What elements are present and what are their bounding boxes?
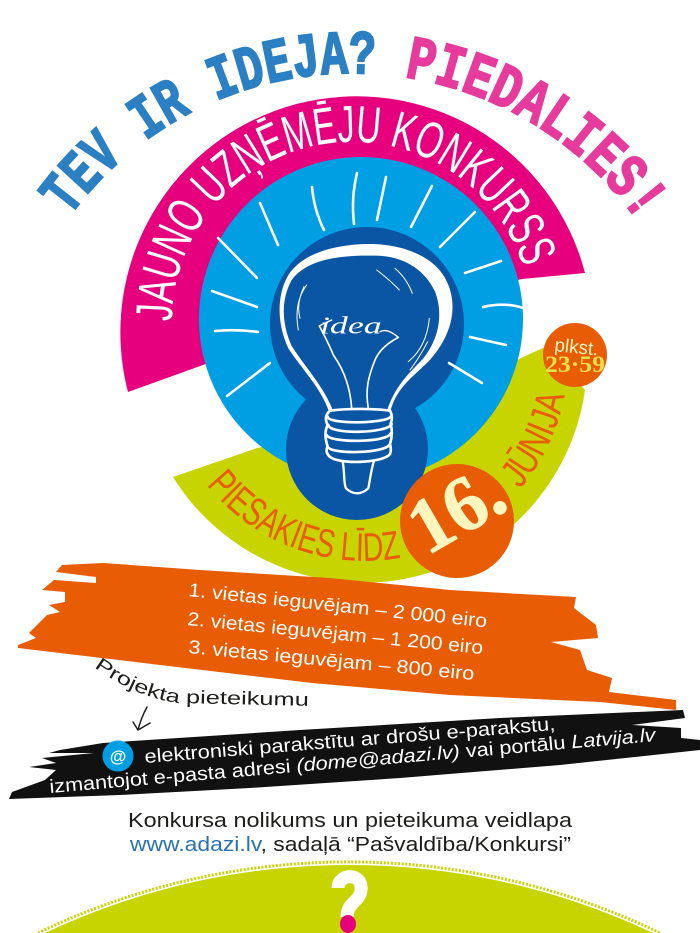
text: competition rules: www.adazi.lv , sadaļā “Pašvaldība/Konkursi” bbox=[129, 834, 571, 856]
badge: plkst. 23:59 bbox=[543, 323, 607, 387]
filament bbox=[319, 326, 352, 408]
panel: green crescent bbox=[173, 348, 585, 583]
badge: plkst. 23:59: plkst. bbox=[553, 335, 599, 361]
text: competition rules bbox=[128, 810, 573, 856]
icon: at sign bbox=[102, 740, 134, 772]
heading: JAUNO UZŅĒMĒJU KONKURSS: JAUNO UZŅĒMĒJU KONKURSS bbox=[136, 100, 555, 320]
panel: prizes brush stroke bbox=[18, 563, 676, 710]
light blue circle bbox=[199, 157, 523, 481]
prize lines: 2. vietas ieguvējam – 1 200 eiro bbox=[187, 609, 484, 659]
title: TEV IR IDEJA?: TEV IR IDEJA? bbox=[36, 30, 374, 210]
title: PIEDALIES!: PIEDALIES! bbox=[406, 36, 666, 214]
text: PIESAKIES LĪDZ: PIESAKIES LĪDZ bbox=[208, 468, 400, 561]
dark blue bulb backdrop bbox=[270, 227, 464, 520]
text: JŪNIJA: JŪNIJA bbox=[502, 395, 565, 486]
text: competition rules: Konkursa nolikums un pieteikuma veidlapa bbox=[128, 810, 573, 832]
prize lines: 3. vietas ieguvējam – 800 eiro bbox=[188, 637, 475, 685]
screw base bbox=[325, 409, 392, 462]
icon: light bulb bbox=[280, 244, 453, 493]
panel: submission brush stroke bbox=[9, 710, 700, 799]
icon: light rays bbox=[212, 173, 523, 396]
badge: plkst. 23:59: 23·59 bbox=[545, 352, 605, 377]
icon: at sign: @ bbox=[110, 747, 126, 766]
prize lines bbox=[187, 580, 488, 685]
idea handwriting: idea bbox=[320, 312, 382, 339]
badge: 16.: 16. bbox=[392, 447, 520, 571]
panel: pink arc bbox=[120, 96, 585, 392]
icon: arrow bbox=[133, 707, 150, 730]
text: Projekta pieteikumu: Projekta pieteikumu bbox=[96, 658, 308, 707]
panel: green dome bbox=[38, 862, 660, 933]
submission text: elektroniski parakstītu ar drošu e-parakstu, bbox=[144, 714, 556, 768]
icon: question mark bbox=[338, 877, 361, 933]
highlights bbox=[297, 268, 429, 370]
submission text: izmantojot e-pasta adresi (dome@adazi.lv) vai portālu Latvija.lv bbox=[49, 725, 658, 798]
prize lines: 1. vietas ieguvējam – 2 000 eiro bbox=[187, 580, 488, 632]
bulb tip bbox=[343, 461, 374, 493]
